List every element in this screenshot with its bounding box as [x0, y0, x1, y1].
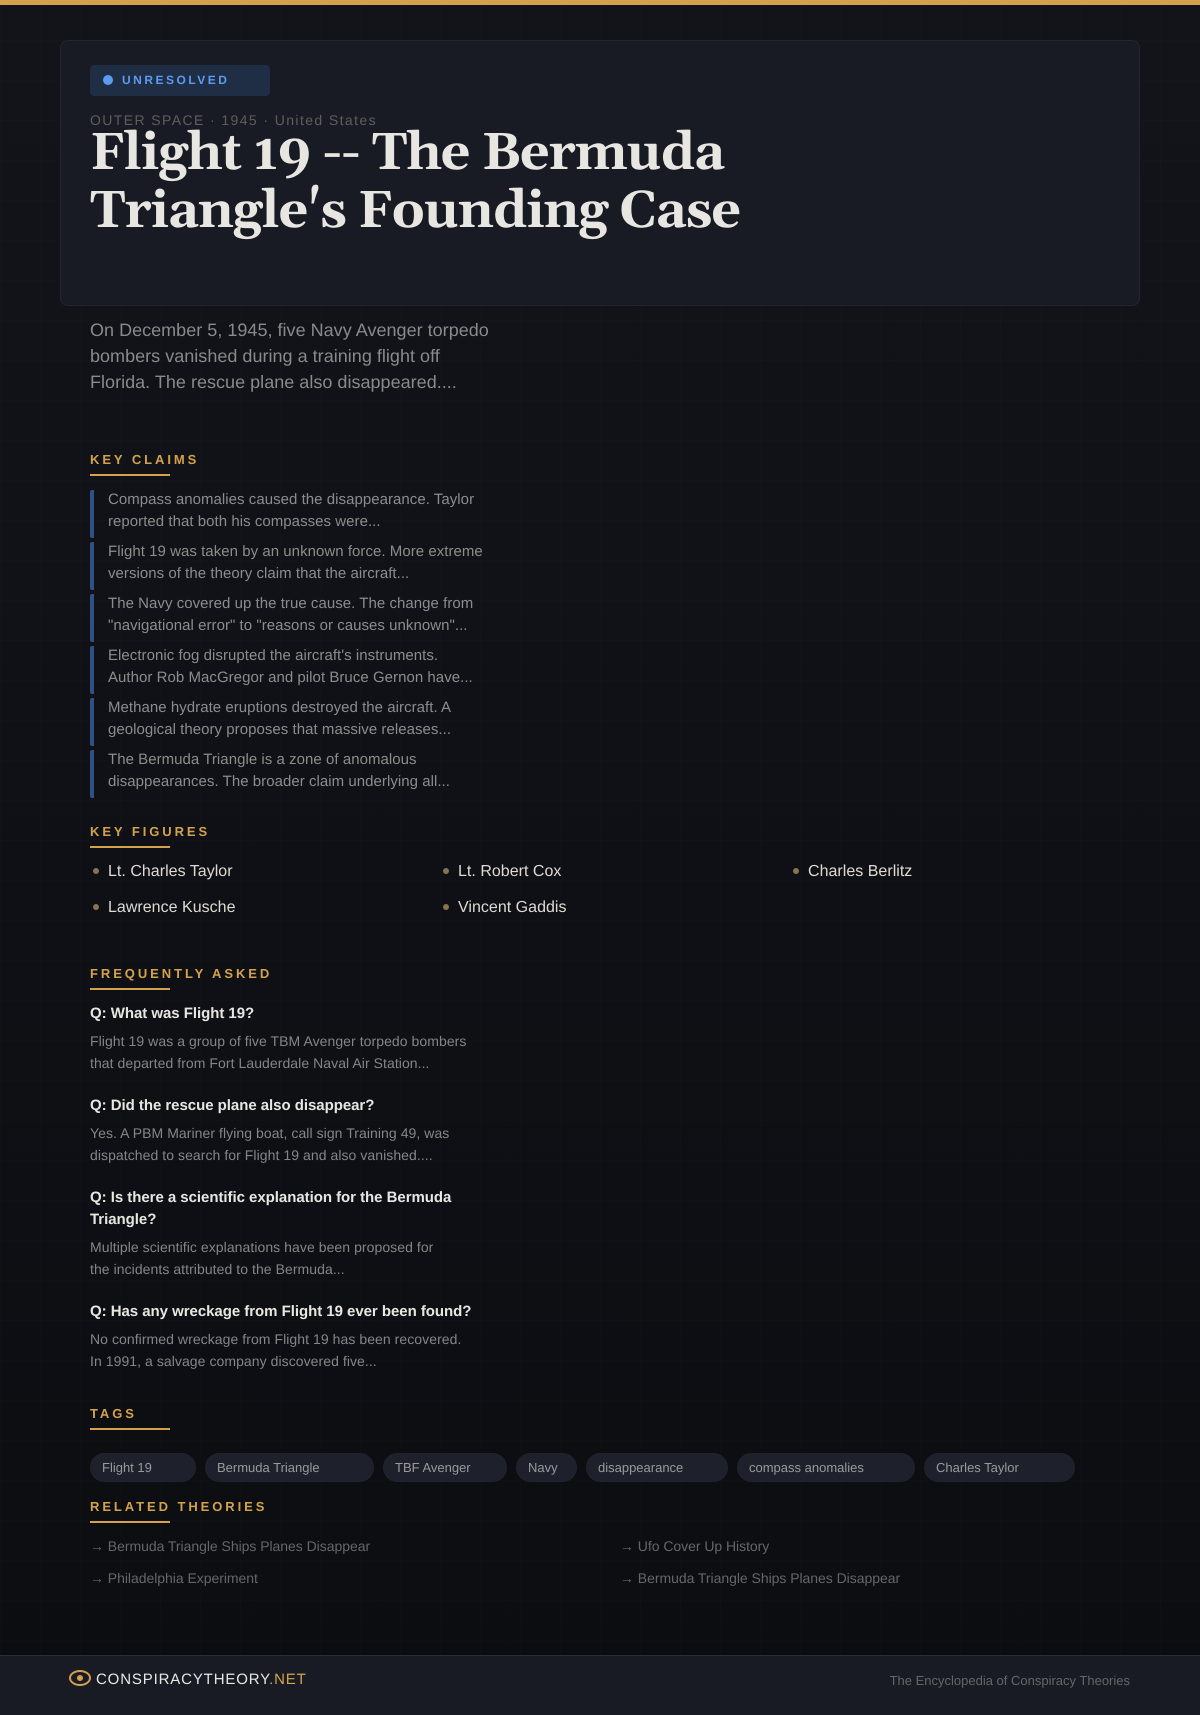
- figure: Lawrence Kusche: Lawrence Kusche: [108, 899, 236, 916]
- claim 3: "navigational error" to "reasons or causes unknown"...: [108, 617, 467, 634]
- status badge: [90, 65, 270, 96]
- faq 4 answer: [90, 1331, 461, 1369]
- title: [90, 121, 740, 245]
- faq 1 answer: [90, 1033, 466, 1071]
- heading: related theories: RELATED THEORIES: [90, 1499, 267, 1514]
- claim 1: reported that both his compasses were...: [108, 513, 381, 530]
- claim 2: [90, 542, 490, 590]
- figure: Lt. Charles Taylor: Lt. Charles Taylor: [108, 863, 233, 880]
- faq 2 answer: [90, 1125, 449, 1163]
- intro paragraph: Florida. The rescue plane also disappeared....: [90, 372, 457, 392]
- faq 2 question: Q: Did the rescue plane also disappear?: [90, 1097, 374, 1114]
- tag: Navy: Navy: [528, 1460, 558, 1475]
- footer tagline: The Encyclopedia of Conspiracy Theories: [890, 1673, 1130, 1688]
- tag: TBF Avenger: [383, 1453, 507, 1482]
- intro paragraph: bombers vanished during a training flight off: [90, 346, 440, 366]
- tag: TBF Avenger: TBF Avenger: [395, 1460, 471, 1475]
- claim 2: versions of the theory claim that the aircraft...: [108, 565, 409, 582]
- tag: Charles Taylor: [924, 1453, 1075, 1482]
- icon: eye logo: [69, 1670, 91, 1686]
- tag: compass anomalies: compass anomalies: [749, 1460, 864, 1475]
- claim 4: Author Rob MacGregor and pilot Bruce Gernon have...: [108, 669, 473, 686]
- faq 1 question: Q: What was Flight 19?: [90, 1005, 254, 1022]
- related link: Philadelphia Experiment: → Philadelphia Experiment: [90, 1570, 258, 1586]
- badge label: UNRESOLVED: [122, 73, 229, 87]
- faq 3 question: [90, 1189, 452, 1228]
- faq 4 question: Q: Has any wreckage from Flight 19 ever been found?: [90, 1303, 471, 1320]
- heading: key figures: KEY FIGURES: [90, 824, 210, 839]
- faq 1 answer: that departed from Fort Lauderdale Naval Air Station...: [90, 1055, 430, 1071]
- panel: hero header: [60, 40, 1140, 306]
- faq 3 question: Triangle?: [90, 1211, 156, 1228]
- tag: disappearance: [586, 1453, 728, 1482]
- tag: Charles Taylor: Charles Taylor: [936, 1460, 1019, 1475]
- icon: status dot: [103, 75, 113, 85]
- claim 1: [90, 490, 490, 538]
- claim 3: The Navy covered up the true cause. The change from: [108, 595, 473, 612]
- top accent bar: [0, 0, 1200, 5]
- meta line: OUTER SPACE · 1945 · United States: [90, 112, 377, 128]
- tag: disappearance: disappearance: [598, 1460, 683, 1475]
- tag: Bermuda Triangle: Bermuda Triangle: [217, 1460, 320, 1475]
- tag: Bermuda Triangle: [205, 1453, 374, 1482]
- heading: tags: TAGS: [90, 1406, 137, 1421]
- claim 4: [90, 646, 490, 694]
- claim 5: geological theory proposes that massive releases...: [108, 721, 451, 738]
- intro paragraph: [90, 320, 489, 392]
- faq 3 answer: [90, 1239, 434, 1277]
- claim 1: Compass anomalies caused the disappearance. Taylor: [108, 491, 474, 508]
- tag: Navy: [516, 1453, 577, 1482]
- faq 3 answer: the incidents attributed to the Bermuda...: [90, 1261, 345, 1277]
- claim 5: [90, 698, 490, 746]
- claim 5: Methane hydrate eruptions destroyed the aircraft. A: [108, 699, 451, 716]
- panel: key claims list: [90, 490, 483, 798]
- intro paragraph: On December 5, 1945, five Navy Avenger torpedo: [90, 320, 489, 340]
- title: Triangle's Founding Case: [90, 179, 740, 245]
- claim 3: [90, 594, 490, 642]
- faq 3 answer: Multiple scientific explanations have been proposed for: [90, 1239, 433, 1255]
- tag: Flight 19: Flight 19: [102, 1460, 152, 1475]
- figure: Lt. Robert Cox: Lt. Robert Cox: [458, 863, 561, 880]
- faq 4 answer: In 1991, a salvage company discovered five...: [90, 1353, 377, 1369]
- tag: compass anomalies: [737, 1453, 915, 1482]
- heading: frequently asked: FREQUENTLY ASKED: [90, 966, 272, 981]
- figure: Vincent Gaddis: Vincent Gaddis: [458, 899, 566, 916]
- brand wordmark: CONSPIRACYTHEORY.NET: [96, 1671, 307, 1688]
- faq 2 answer: dispatched to search for Flight 19 and also vanished....: [90, 1147, 433, 1163]
- related link: Ufo Cover Up History: → Ufo Cover Up History: [620, 1538, 769, 1554]
- title: Flight 19 -- The Bermuda: [90, 121, 724, 187]
- heading: key claims: KEY CLAIMS: [90, 452, 199, 467]
- claim 2: Flight 19 was taken by an unknown force. More extreme: [108, 543, 483, 560]
- figure: Charles Berlitz: Charles Berlitz: [808, 863, 912, 880]
- icon: pupil: [77, 1675, 83, 1681]
- faq 3 question: Q: Is there a scientific explanation for the Bermuda: [90, 1189, 451, 1206]
- claim 4: Electronic fog disrupted the aircraft's instruments.: [108, 647, 438, 664]
- faq 2 answer: Yes. A PBM Mariner flying boat, call sign Training 49, was: [90, 1125, 449, 1141]
- footer: [0, 1655, 1200, 1715]
- claim 6: disappearances. The broader claim underlying all...: [108, 773, 450, 790]
- faq 1 answer: Flight 19 was a group of five TBM Avenger torpedo bombers: [90, 1033, 466, 1049]
- claim 6: [90, 750, 490, 798]
- related link: Bermuda Triangle Ships Planes Disappear: → Bermuda Triangle Ships Planes Disappear: [90, 1538, 370, 1554]
- claim 6: The Bermuda Triangle is a zone of anomalous: [108, 751, 417, 768]
- related link: Bermuda Triangle Ships Planes Disappear (second): → Bermuda Triangle Ships Planes Disappear: [620, 1570, 900, 1586]
- faq 4 answer: No confirmed wreckage from Flight 19 has been recovered.: [90, 1331, 461, 1347]
- tag: Flight 19: [90, 1453, 196, 1482]
